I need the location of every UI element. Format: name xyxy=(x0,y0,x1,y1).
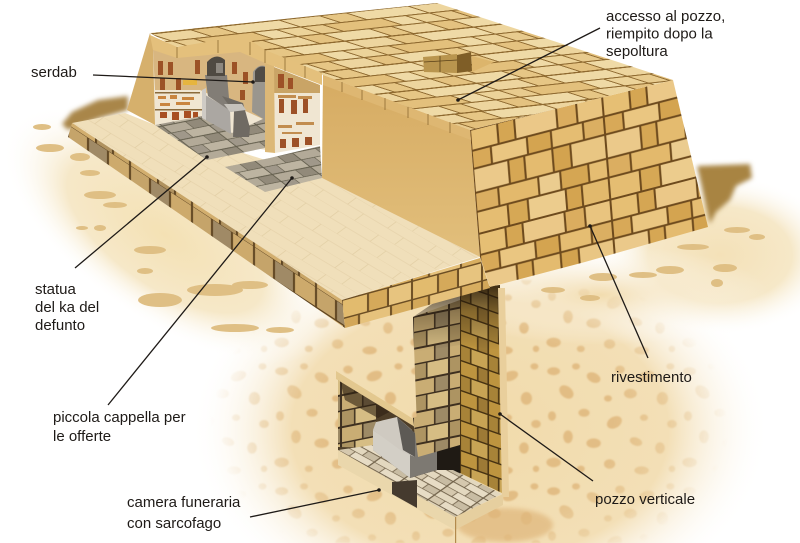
left outer wall xyxy=(127,33,155,125)
vertical sand crease xyxy=(455,517,456,543)
mastaba structure xyxy=(68,3,708,543)
label: camera funeraria con sarcofago: con sarcofago xyxy=(127,515,221,532)
callout lines xyxy=(75,28,648,517)
label: accesso al pozzo: riempito dopo la xyxy=(606,26,713,42)
label: piccola cappella per le offerte: piccola cappella per xyxy=(53,409,186,426)
room 1 floor xyxy=(155,116,265,160)
room 2 floor xyxy=(225,146,322,192)
right casing wall xyxy=(470,80,708,287)
sarcophagus xyxy=(373,417,437,478)
label: statua del ka del defunto: statua xyxy=(35,281,77,298)
label: serdab: serdab xyxy=(31,64,77,81)
sand mottling xyxy=(200,280,740,543)
shadow on ground left xyxy=(62,96,128,130)
label: camera funeraria con sarcofago: camera funeraria xyxy=(127,494,241,511)
shadow on ground right xyxy=(697,164,752,224)
ka statue xyxy=(202,56,250,137)
platform front stones xyxy=(68,123,345,328)
stone edge along the cut xyxy=(323,75,471,140)
front lintel xyxy=(150,35,322,85)
shaft opening on top xyxy=(423,52,494,73)
room 1 back wall paintings xyxy=(153,50,265,150)
platform paving xyxy=(72,113,480,300)
label: piccola cappella per le offerte: le offerte xyxy=(53,428,111,445)
label: accesso al pozzo: accesso al pozzo, xyxy=(606,8,725,25)
wash near the shaft base xyxy=(457,508,553,542)
ground blotches xyxy=(33,124,765,333)
top surface xyxy=(150,3,673,130)
shaft: brick walls xyxy=(413,285,509,497)
pillar xyxy=(265,58,275,153)
label: statua del ka del defunto: defunto xyxy=(35,317,85,334)
room 2 wall paintings xyxy=(274,67,320,153)
second statue xyxy=(252,66,265,120)
cut face xyxy=(322,75,480,257)
burial chamber xyxy=(336,371,503,530)
label: accesso al pozzo: sepoltura xyxy=(606,43,668,60)
label: pozzo verticale: pozzo verticale xyxy=(595,491,695,508)
label: statua del ka del defunto: del ka del xyxy=(35,299,99,316)
platform end stones xyxy=(342,258,490,328)
label: rivestimento: rivestimento xyxy=(611,369,692,386)
